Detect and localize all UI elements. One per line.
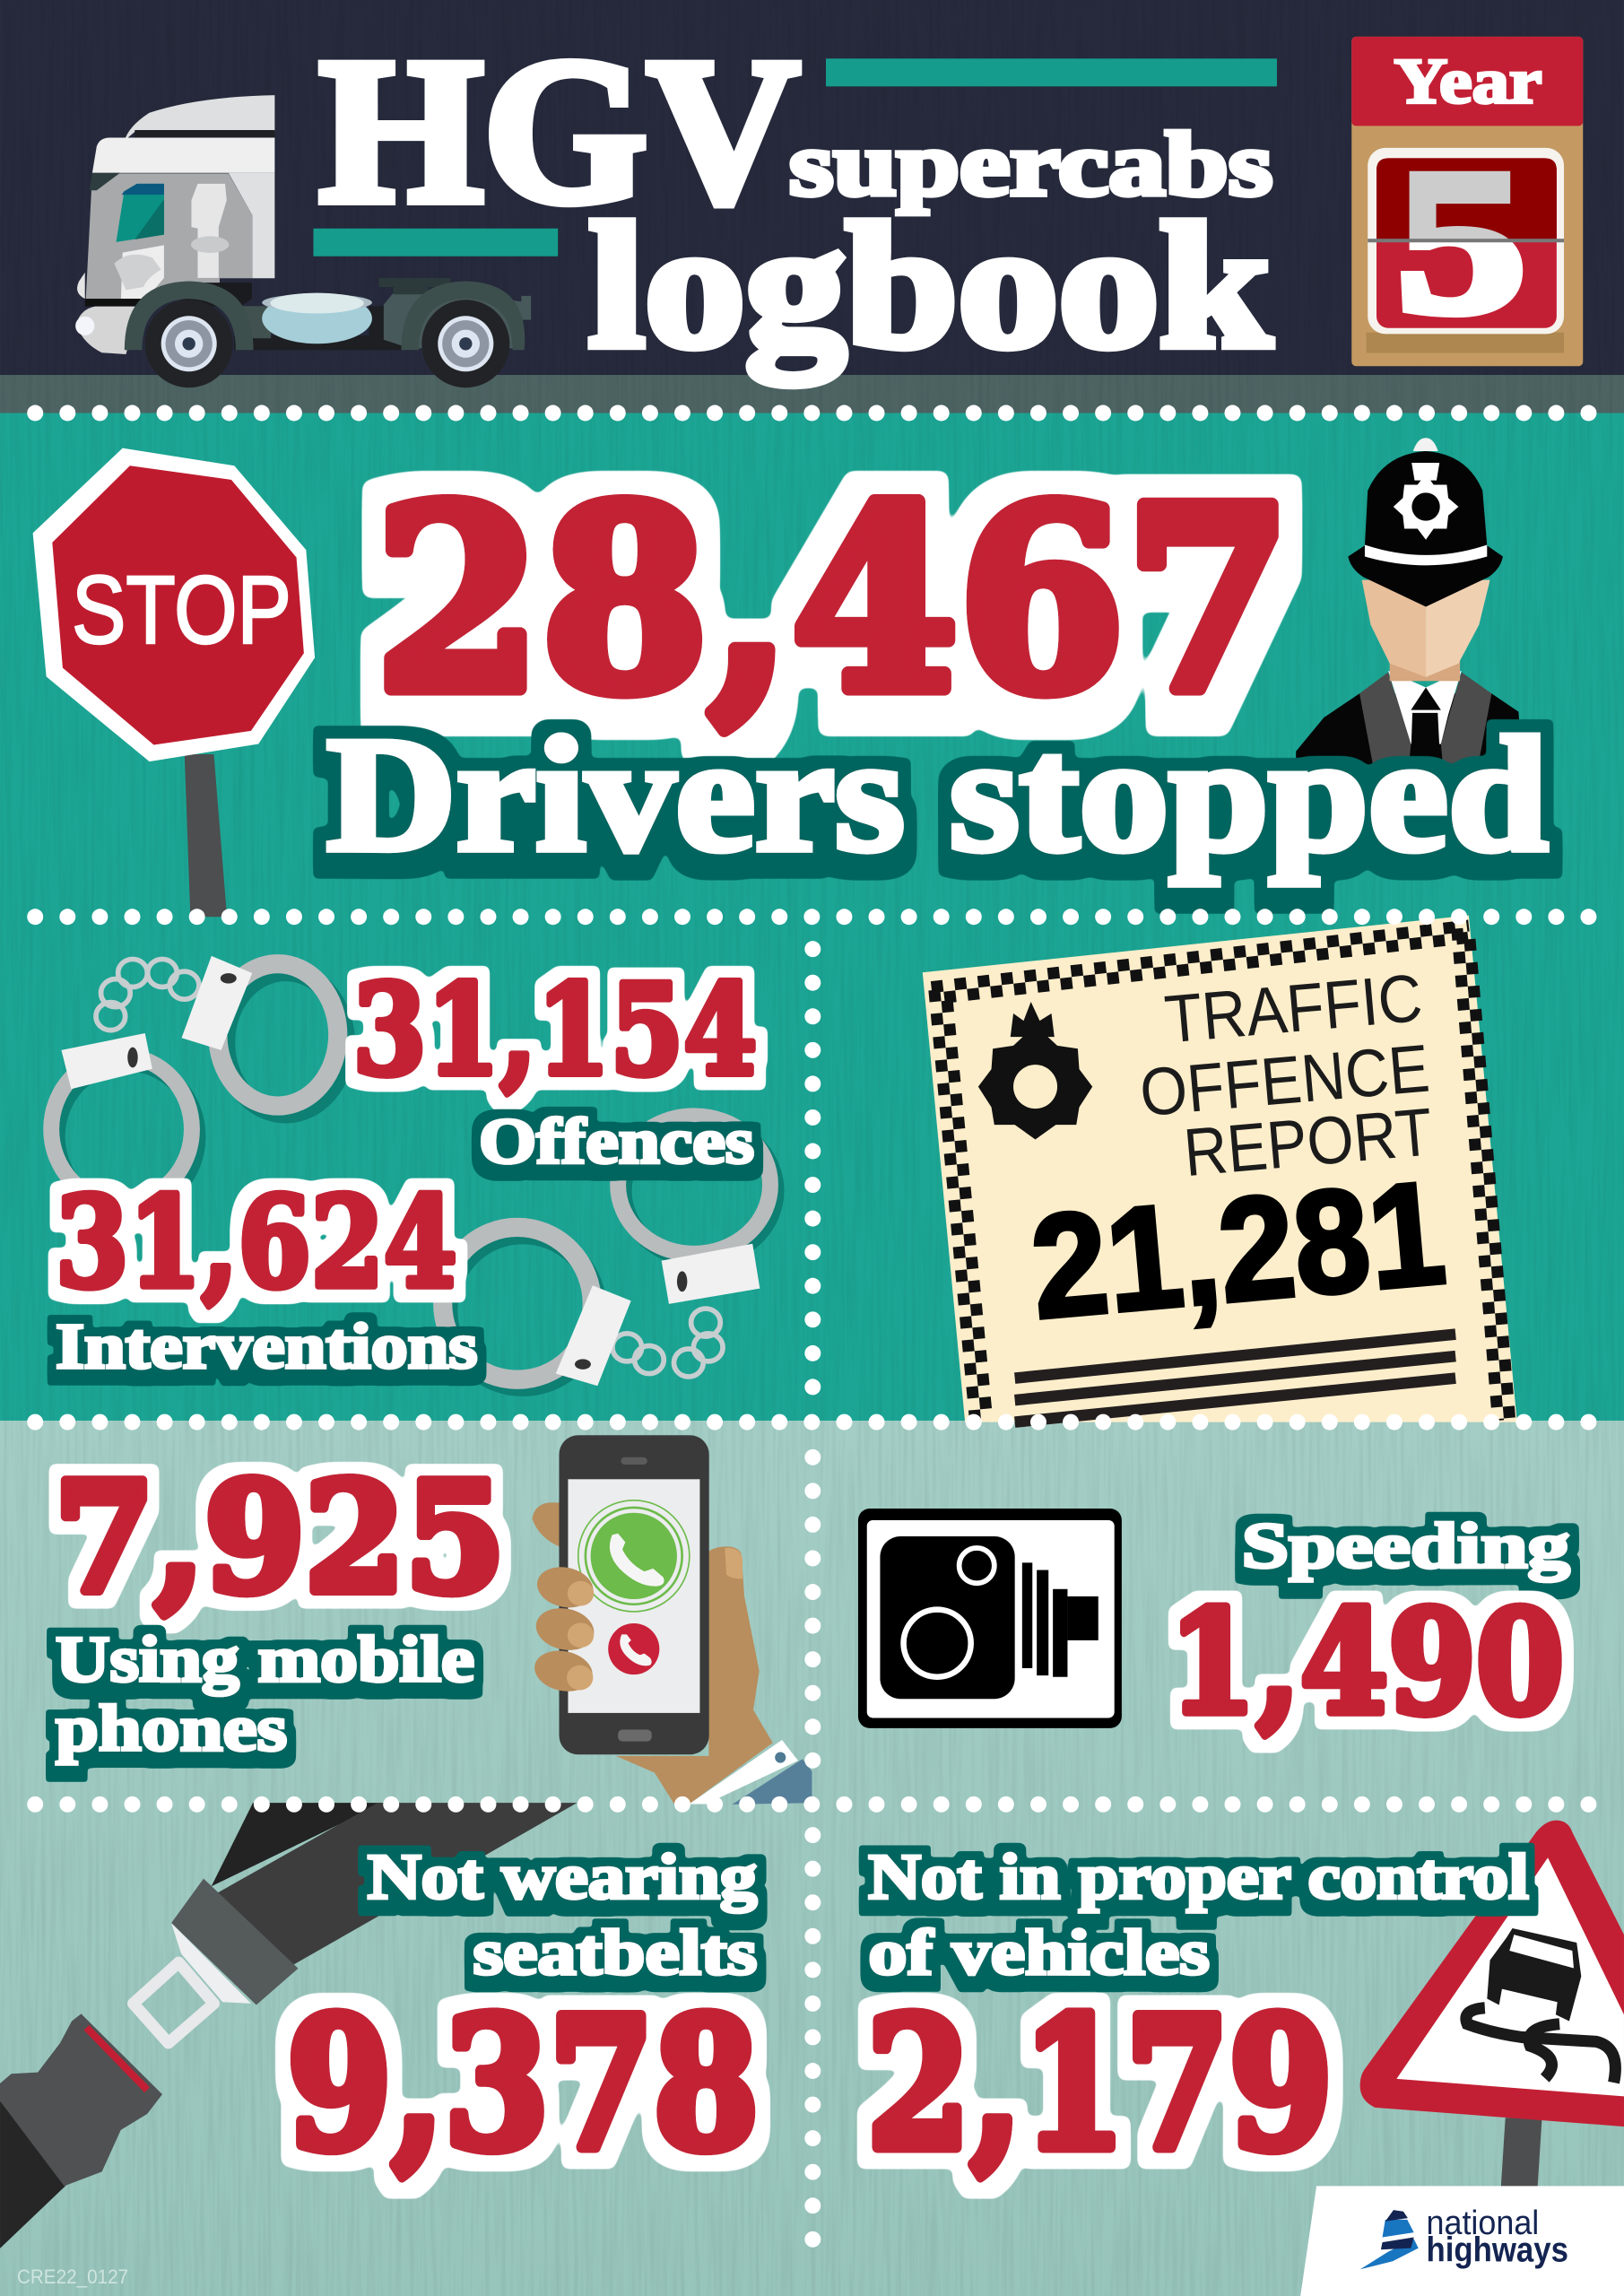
illustration: handcuffs bottom [443,1116,776,1387]
label: Not wearing seatbelts: seatbelts [473,1917,757,1988]
stat: 1,490: 1,490 [1168,1579,1564,1746]
report checker border [932,926,1510,1421]
belt strap back [212,1803,384,1886]
helmet badge [1394,463,1458,540]
icon: speed camera sign [858,1509,1122,1728]
fingers [531,1562,598,1696]
belt clamp [171,1879,298,2005]
jacket sleeve [733,1759,812,1805]
officer face [1362,580,1490,681]
officer shirt [1388,671,1462,744]
logo mark [1360,2210,1419,2269]
report heading [1137,960,1436,1190]
label: Using mobile phones: Using mobile [56,1623,474,1696]
truck roof fairing [125,95,274,141]
calendar number: 5 [1397,128,1526,355]
stat: 2,179: 2,179 [867,1979,1333,2190]
stat: 31,154: 31,154 [353,957,757,1103]
phone [559,1435,709,1754]
warning sign post [1501,2118,1542,2187]
belt strap front [205,1803,577,1973]
stop sign [33,448,315,761]
traffic offence report [923,916,1517,1422]
report badge [978,1002,1092,1139]
truck window [117,184,164,242]
label: Using mobile phones: phones [56,1692,287,1764]
fuel tank [262,293,372,344]
illustration: seatbelt [0,1803,577,2248]
truck cab grey side [86,173,252,299]
label: Not wearing seatbelts [368,1840,757,1988]
illustration: hand holding phone [531,1435,812,1805]
answer call icon [578,1500,690,1612]
stop sign post [185,754,227,917]
stat: 9,378: 9,378 [287,1979,759,2190]
officer lapels [1359,673,1491,776]
label: Not in proper control of vehicles: of vehicles [868,1917,1210,1988]
teal bar top [826,58,1277,86]
logo text [1427,2204,1568,2269]
belt tongue [134,1923,251,2043]
logo text: highways [1427,2231,1568,2269]
truck lower panel [114,245,164,299]
label: Not in proper control of vehicles: Not in proper control [868,1840,1529,1912]
truck bumper [75,307,139,354]
end call icon [608,1623,659,1674]
truck door pillar [191,184,229,278]
report number: 21,281 [1025,1150,1451,1350]
officer helmet [1348,451,1503,607]
label: Interventions: Interventions [56,1310,477,1382]
label: Offences: Offences [479,1106,754,1178]
big stat: 28,467: 28,467 [375,452,1291,748]
front wheel [145,300,233,387]
logo text: national [1427,2204,1539,2241]
truck chassis [176,278,531,350]
rear wheel [421,300,509,387]
label: Not in proper control of vehicles [868,1840,1529,1988]
label: Speeding: Speeding [1242,1509,1570,1581]
police officer [1296,438,1523,776]
stat: 7,925: 7,925 [54,1448,505,1626]
shirt cuff [689,1740,798,1804]
illustration: truck cab [75,95,531,387]
report lines [1015,1335,1455,1422]
warning sign: slippery road [1360,1821,1624,2126]
logo: national highways [1300,2186,1624,2296]
title word: HGV: HGV [319,16,800,247]
truck front arch [125,282,254,350]
palm and thumb [616,1546,773,1804]
title: HGV supercabs logbook [313,16,1277,385]
report heading: REPORT [1181,1093,1436,1190]
label: Drivers stopped: Drivers stopped [326,703,1548,885]
calendar label: Year [1394,45,1542,117]
truck rear arch [401,282,525,350]
truck cab top [92,137,274,173]
officer jacket [1296,693,1523,776]
label: Using mobile phones [56,1623,474,1764]
dotted dividers [35,413,1596,2270]
report heading: OFFENCE [1137,1030,1432,1130]
sliding car [1487,1928,1581,2021]
title word: logbook: logbook [588,187,1272,385]
skid marks [1466,2008,1615,2083]
reference code: CRE22_0127 [17,2266,128,2288]
stat: 31,624: 31,624 [56,1170,457,1316]
title word: supercabs: supercabs [789,114,1272,214]
report heading: TRAFFIC [1162,960,1425,1057]
belt buckle [0,2013,162,2248]
teal bar left [313,229,558,257]
illustration: handcuffs top [51,956,345,1210]
label: Not wearing seatbelts: Not wearing [368,1840,757,1912]
stop sign word: STOP [72,555,291,664]
hand back finger [532,1502,560,1546]
calendar: Year 5 [1351,37,1583,366]
